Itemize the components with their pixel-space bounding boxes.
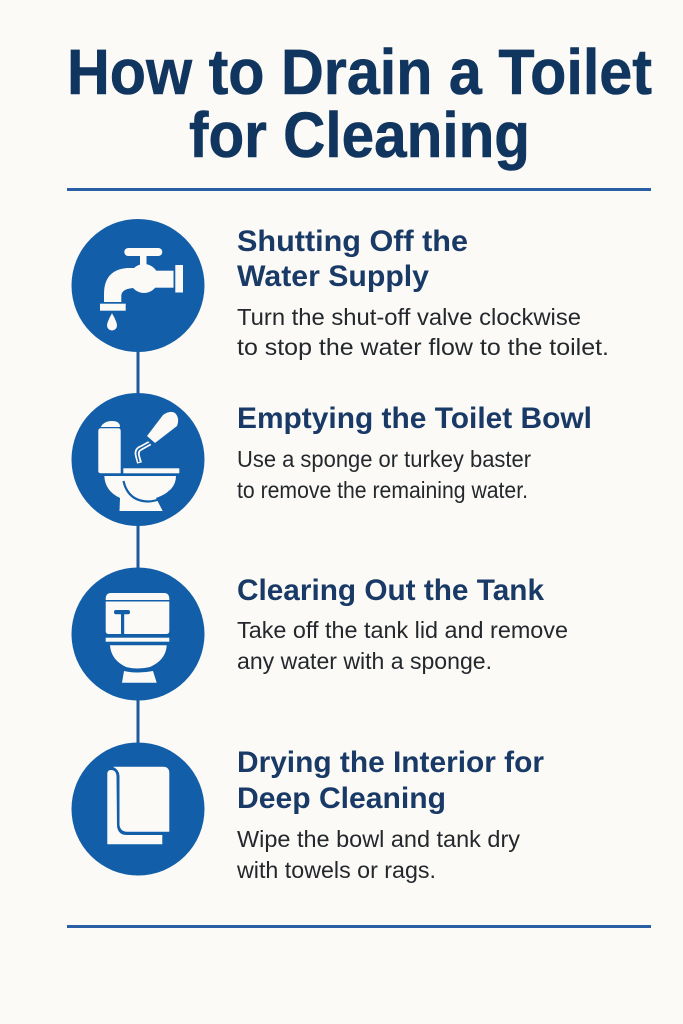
- icon: toilet tank: [72, 568, 204, 700]
- description: to stop the water flow to the toilet.: [237, 334, 609, 360]
- description: [236, 826, 520, 883]
- step 3: clearing out the tank: [72, 568, 568, 700]
- step 2: emptying the toilet bowl: [72, 393, 592, 526]
- title: [67, 36, 652, 171]
- heading: Clearing Out the Tank: [237, 574, 545, 607]
- heading: Deep Cleaning: [237, 782, 446, 815]
- title: How to Drain a Toilet: [67, 36, 652, 108]
- icon: towel: [72, 742, 204, 876]
- heading: Drying the Interior for: [237, 746, 545, 779]
- description: [237, 304, 609, 360]
- heading: [237, 225, 468, 293]
- description: to remove the remaining water.: [237, 477, 528, 503]
- icon: toilet and baster: [72, 393, 204, 526]
- step 4: drying the interior: [72, 742, 545, 883]
- description: Take off the tank lid and remove: [237, 617, 568, 643]
- heading: Shutting Off the: [237, 225, 468, 258]
- heading: Emptying the Toilet Bowl: [237, 402, 592, 435]
- title: for Cleaning: [189, 99, 530, 171]
- description: Use a sponge or turkey baster: [237, 446, 531, 472]
- heading: Water Supply: [237, 260, 430, 293]
- step 1: shutting off the water supply: [72, 219, 609, 360]
- description: Wipe the bowl and tank dry: [237, 826, 520, 852]
- description: with towels or rags.: [236, 857, 436, 883]
- heading: [237, 746, 545, 815]
- description: [237, 617, 568, 674]
- timeline connector: [136, 345, 140, 765]
- description: Turn the shut-off valve clockwise: [237, 304, 581, 330]
- icon: faucet: [72, 219, 204, 352]
- description: any water with a sponge.: [237, 648, 492, 674]
- description: [237, 446, 531, 503]
